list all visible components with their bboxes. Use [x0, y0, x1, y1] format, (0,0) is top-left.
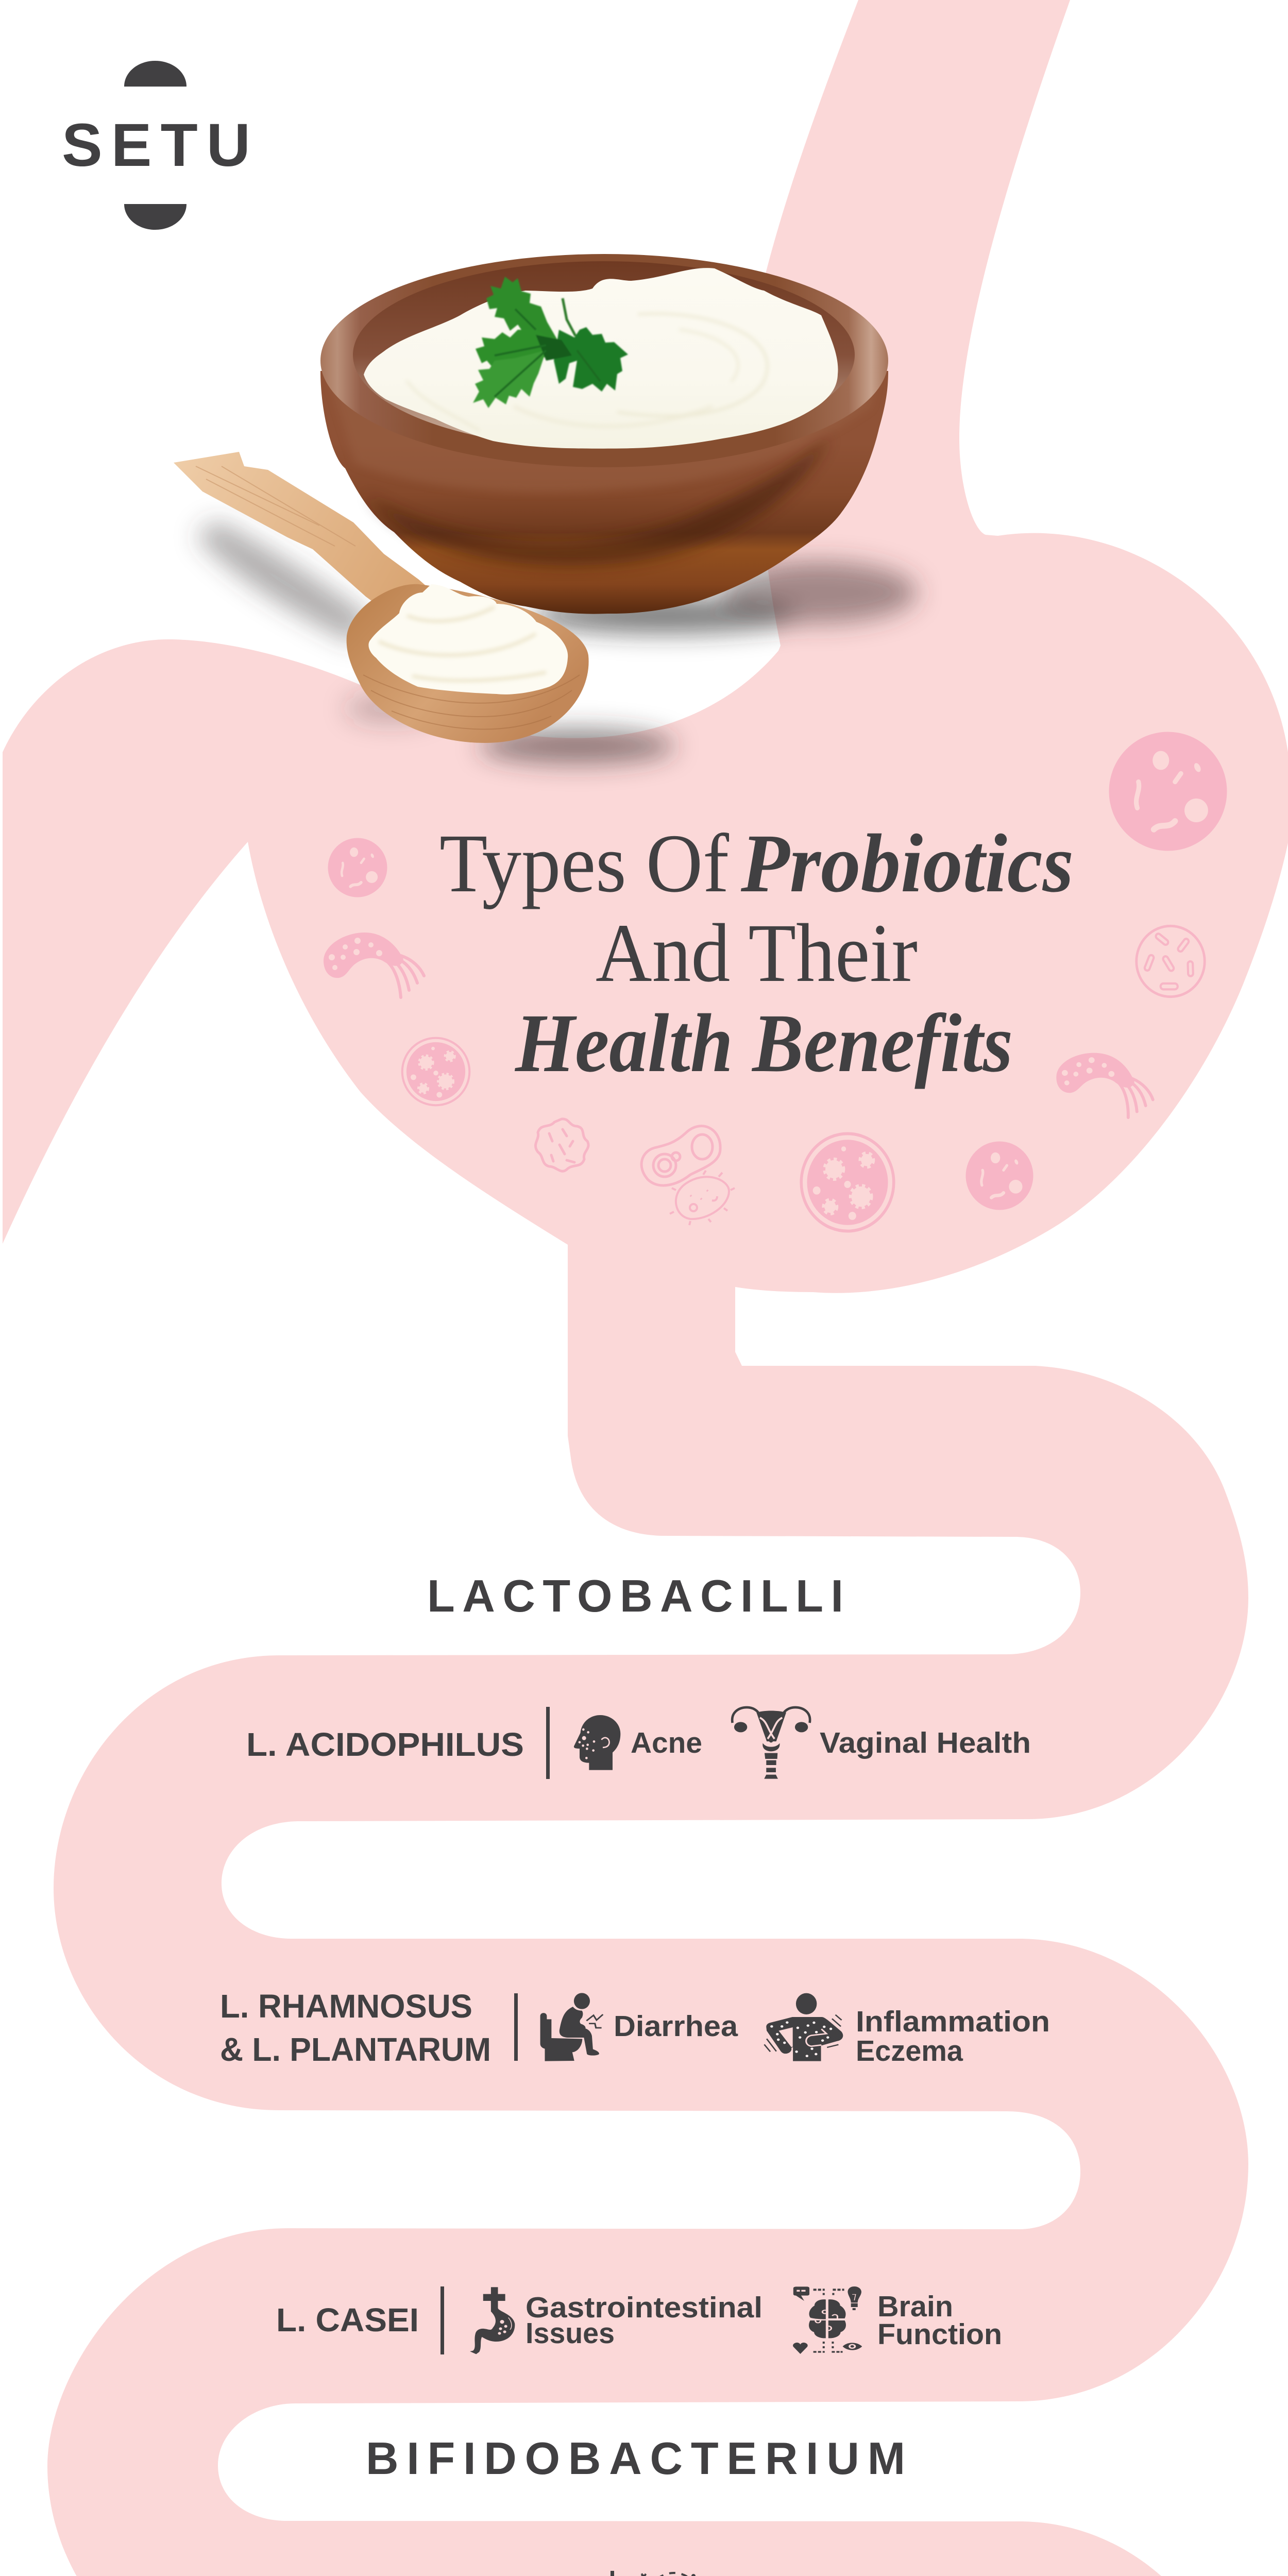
- icon: acne face: [574, 1715, 620, 1770]
- photo: bowl of yogurt with wooden spoon: [174, 254, 917, 764]
- heading: Lactobacilli: LACTOBACILLI: [427, 1570, 843, 1621]
- microbe: ring with stars left: [402, 1038, 469, 1105]
- wooden bowl: [320, 254, 888, 614]
- row: L. casei: [276, 2286, 1002, 2354]
- title: And Their: [596, 907, 918, 999]
- title: Probiotics: [740, 818, 1074, 910]
- shadow under bowl and spoon: [196, 520, 917, 764]
- yogurt in bowl: [364, 268, 838, 448]
- icon: person on toilet: [540, 1993, 603, 2061]
- icon: uterus: [732, 1707, 810, 1779]
- logo: SETU: [62, 61, 250, 230]
- microbe: flagellated right: [1053, 1049, 1157, 1120]
- logo: SETU: SETU: [62, 111, 250, 179]
- row: L. acidophilus: L. ACIDOPHILUS: [246, 1726, 524, 1763]
- heading: Bifidobacterium: BIFIDOBACTERIUM: [366, 2433, 905, 2484]
- row: L. rhamnosus and L. plantarum: & L. PLANTARUM: [220, 2031, 491, 2068]
- microbe: flagellated left: [324, 933, 424, 997]
- row: L. rhamnosus and L. plantarum: L. RHAMNOSUS: [220, 1988, 472, 2025]
- microbe: ring with rods: [1137, 926, 1205, 997]
- microbe: large ring with stars: [801, 1133, 894, 1231]
- yogurt in spoon: [368, 584, 568, 694]
- icon: brain with puzzle: [793, 2286, 862, 2354]
- row: L. casei: Issues: [526, 2317, 615, 2350]
- icon: person with immunity shield: [637, 2573, 709, 2576]
- wooden spoon: [174, 452, 589, 743]
- parsley garnish: [473, 277, 628, 408]
- microbe: spiky outline: [535, 1119, 588, 1171]
- row: L. casei: Function: [877, 2318, 1002, 2351]
- row: B. lactis: [420, 2571, 859, 2576]
- microbe: large spotted: [1109, 732, 1227, 851]
- row: L. casei: Gastrointestinal: [526, 2291, 762, 2324]
- row: L. acidophilus: Vaginal Health: [820, 1726, 1031, 1759]
- title: Health Benefits: [514, 997, 1013, 1090]
- icon: person with eczema: [764, 1993, 843, 2061]
- microbe: peanut cell outline: [641, 1126, 720, 1185]
- row: L. rhamnosus and L. plantarum: [220, 1988, 1050, 2068]
- icon: stomach with cross: [470, 2287, 515, 2354]
- row: L. casei: Brain: [877, 2290, 953, 2323]
- row: L. rhamnosus and L. plantarum: Inflammation: [856, 2005, 1050, 2038]
- microbe: small spotted: [328, 838, 387, 897]
- title: Types Of: [439, 818, 729, 910]
- microbe icons in stomach: [324, 732, 1227, 1231]
- microbe: oval bacterium: [670, 1171, 735, 1225]
- row: L. acidophilus: [246, 1707, 1031, 1779]
- row: L. rhamnosus and L. plantarum: Eczema: [856, 2035, 963, 2067]
- row: L. rhamnosus and L. plantarum: Diarrhea: [614, 2010, 738, 2043]
- row: L. casei: L. CASEI: [276, 2301, 419, 2338]
- microbe: spotted bottom: [965, 1142, 1033, 1210]
- row: L. acidophilus: Acne: [631, 1726, 702, 1759]
- title: [439, 818, 1074, 1090]
